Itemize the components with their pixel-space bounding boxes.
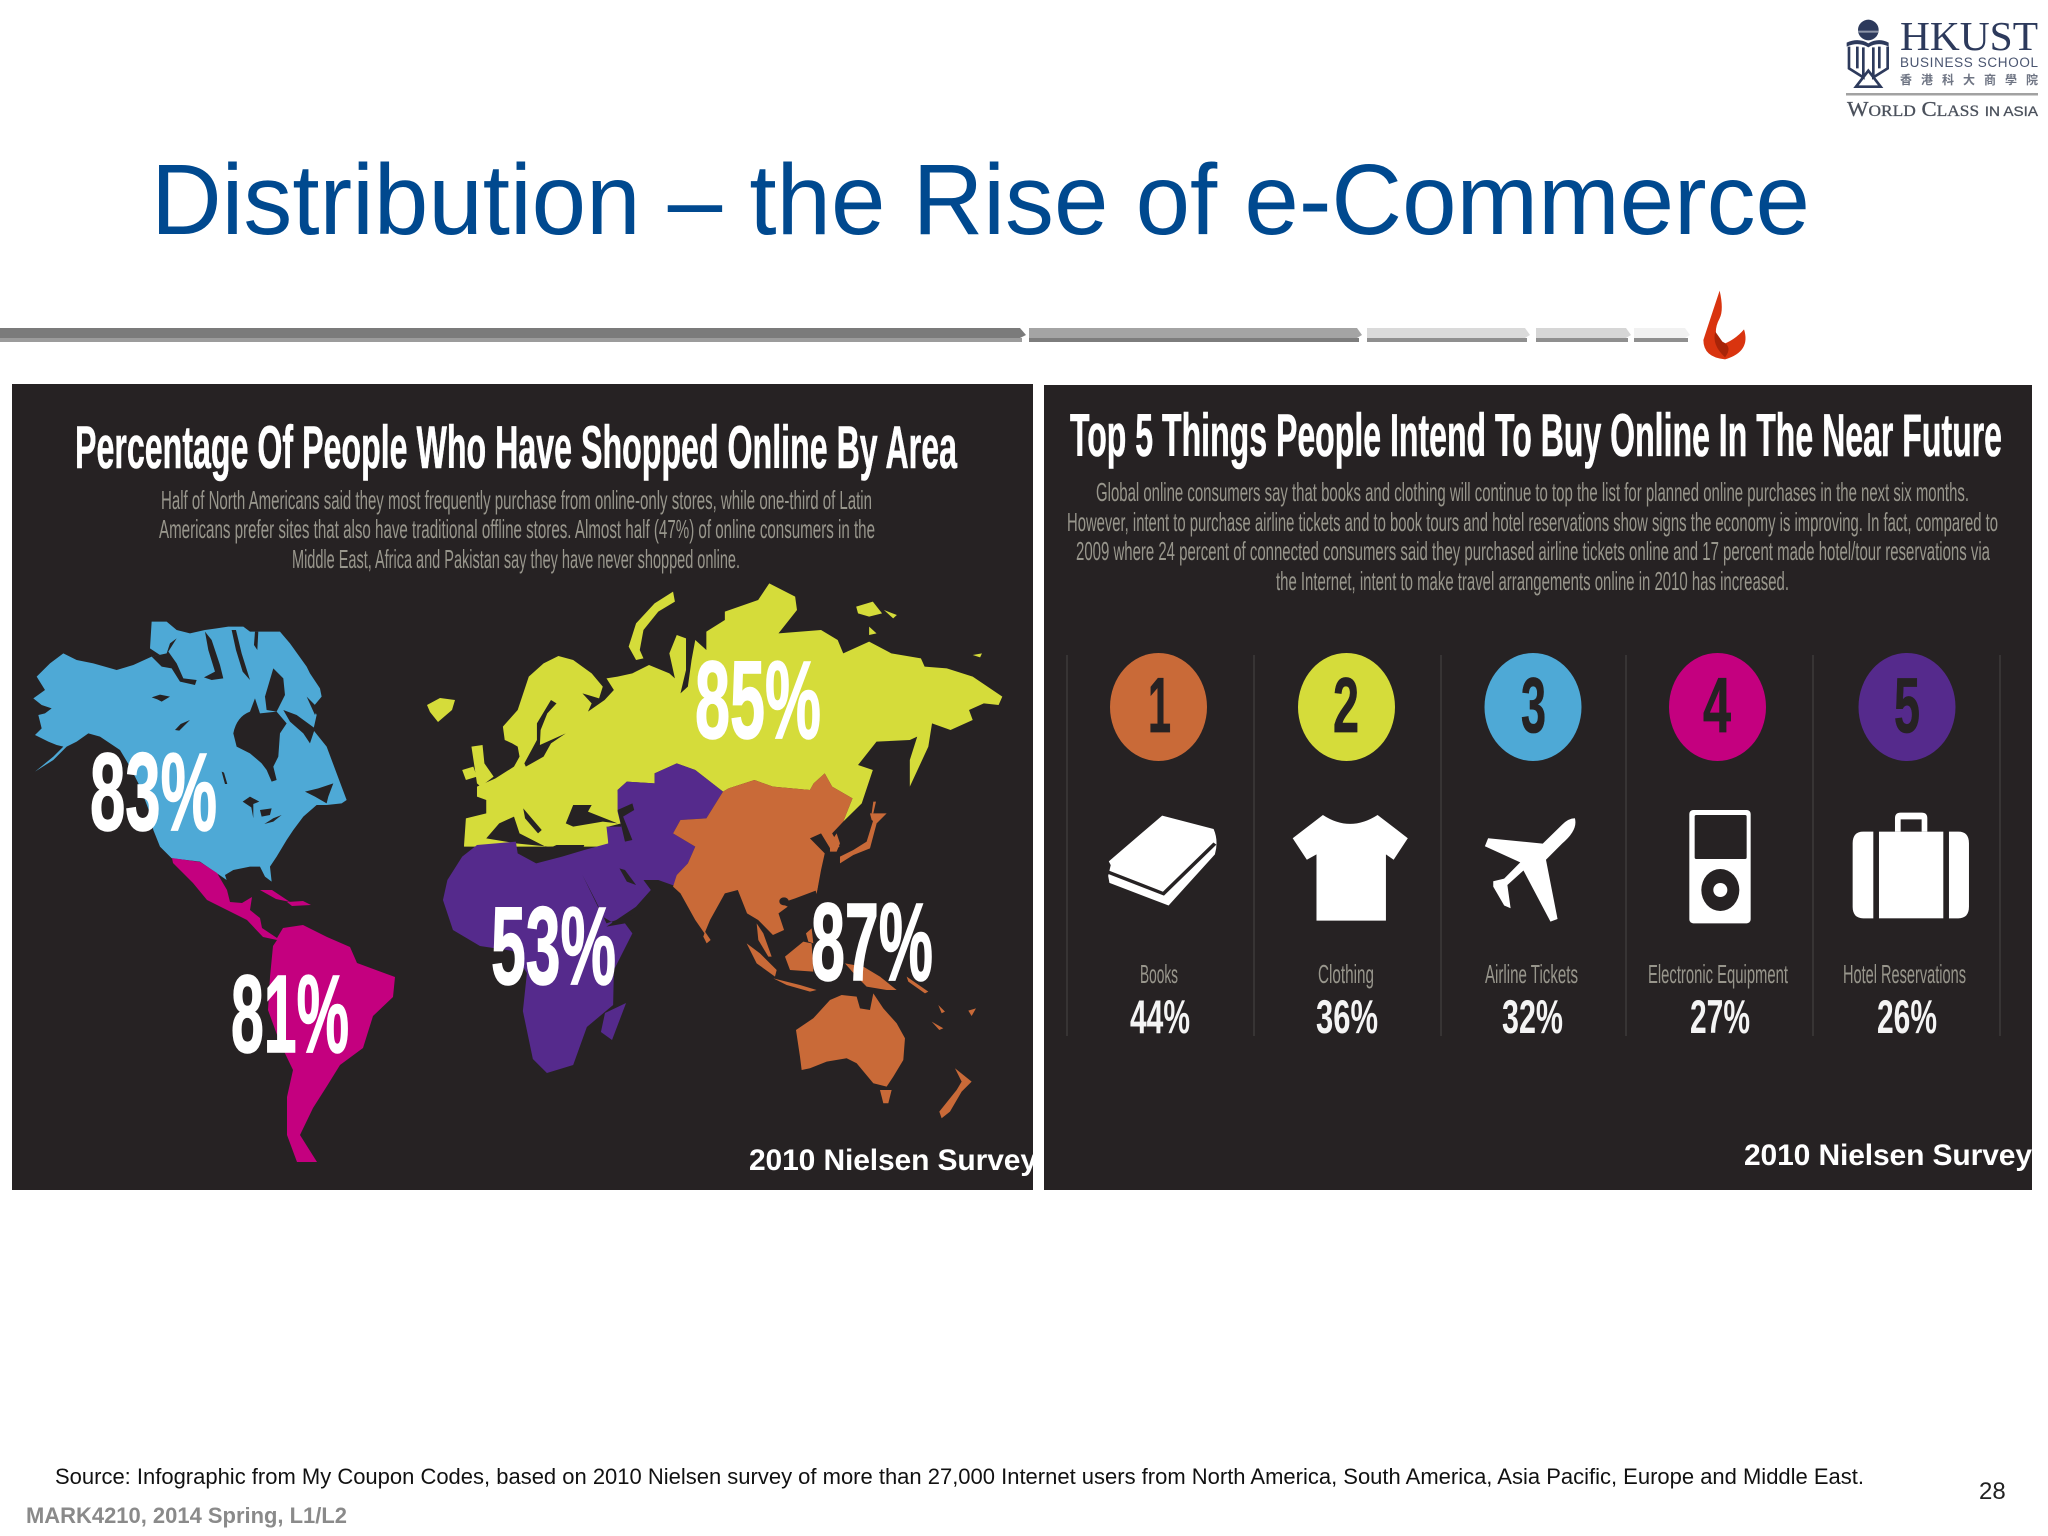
panel heading: Percentage Of People Who Have Shopped Online By Area	[75, 414, 957, 481]
logo tagline: WORLD CLASS IN ASIA	[1847, 97, 2039, 121]
panel description: Half of North Americans said they most frequently purchase from online-only stores, while one-third of Latin	[161, 485, 872, 515]
page number: 28	[1979, 1478, 2006, 1505]
item 4: electronic equipment: Electronic Equipment	[1648, 959, 1788, 989]
item 1: books	[1108, 653, 1217, 1043]
label: Latin America 81%: 81%	[231, 953, 349, 1076]
icon: HKUST emblem	[1847, 20, 1889, 87]
item 5: hotel reservations	[1843, 653, 1969, 1043]
map: Latin America	[172, 858, 395, 1162]
item 3: airline tickets: Airline Tickets	[1485, 959, 1578, 989]
icon: plane	[1485, 818, 1575, 922]
item 3: airline tickets: 3	[1521, 661, 1546, 749]
map: Iceland	[427, 698, 455, 722]
map: Africa and Middle East	[443, 763, 723, 1073]
source note: Source: Infographic from My Coupon Codes, based on 2010 Nielsen survey of more than 27,000 Internet users from North America, South America, Asia Pacific, Europe and Middle East.	[55, 1464, 1864, 1489]
title: Distribution – the Rise of e-Commerce	[151, 144, 1810, 256]
item 5: hotel reservations: 5	[1894, 661, 1920, 749]
divider bar with arrow segments	[0, 328, 1690, 342]
map: Asia Pacific	[673, 773, 976, 1118]
item 1: books: 1	[1148, 661, 1171, 749]
item 2: clothing	[1293, 653, 1408, 1043]
item 3: airline tickets: 32%	[1502, 990, 1563, 1043]
icon: music player	[1689, 810, 1751, 923]
item 3: airline tickets	[1484, 653, 1582, 1043]
panel description: Middle East, Africa and Pakistan say they have never shopped online.	[292, 544, 740, 574]
logo chinese name: 香港科大商學院	[1900, 72, 2038, 87]
map: North America	[33, 622, 347, 882]
item 4: electronic equipment: 27%	[1690, 990, 1750, 1043]
item 2: clothing: 36%	[1316, 990, 1378, 1043]
logo wordmark: HKUST	[1900, 13, 2038, 59]
label: Europe and Russia 85%: 85%	[695, 639, 821, 762]
item 4: electronic equipment: 4	[1703, 661, 1731, 749]
logo subtitle: BUSINESS SCHOOL	[1900, 55, 2038, 70]
label: Middle East and Africa 53%: 53%	[491, 885, 616, 1008]
source tag right: 2010 Nielsen Survey	[1744, 1139, 2032, 1172]
source tag left: 2010 Nielsen Survey	[749, 1144, 1037, 1177]
label: Asia Pacific 87%: 87%	[811, 881, 933, 1004]
label: North America 83%: 83%	[90, 731, 217, 854]
item 2: clothing: 2	[1333, 661, 1359, 749]
item 4: electronic equipment	[1648, 653, 1788, 1043]
logo: HKUST Business School	[1846, 13, 2039, 121]
panel description	[159, 485, 875, 574]
icon: book	[1108, 816, 1217, 906]
item 2: clothing: Clothing	[1318, 959, 1374, 989]
icon: suitcase	[1853, 813, 1969, 918]
item 5: hotel reservations: 26%	[1877, 990, 1937, 1043]
panel description: Americans prefer sites that also have traditional offline stores. Almost half (47%) of online consumers in the	[159, 514, 875, 544]
panel description	[1067, 477, 1998, 596]
item 1: books: 44%	[1130, 990, 1190, 1043]
item 1: books: Books	[1140, 959, 1178, 989]
map: Europe and Russia	[462, 583, 1002, 850]
course footer: MARK4210, 2014 Spring, L1/L2	[26, 1503, 347, 1528]
panel: shopped online by area	[12, 384, 1037, 1190]
panel: top 5 things	[1044, 385, 2032, 1190]
icon: flame	[1703, 291, 1746, 359]
icon: t-shirt	[1293, 815, 1408, 921]
